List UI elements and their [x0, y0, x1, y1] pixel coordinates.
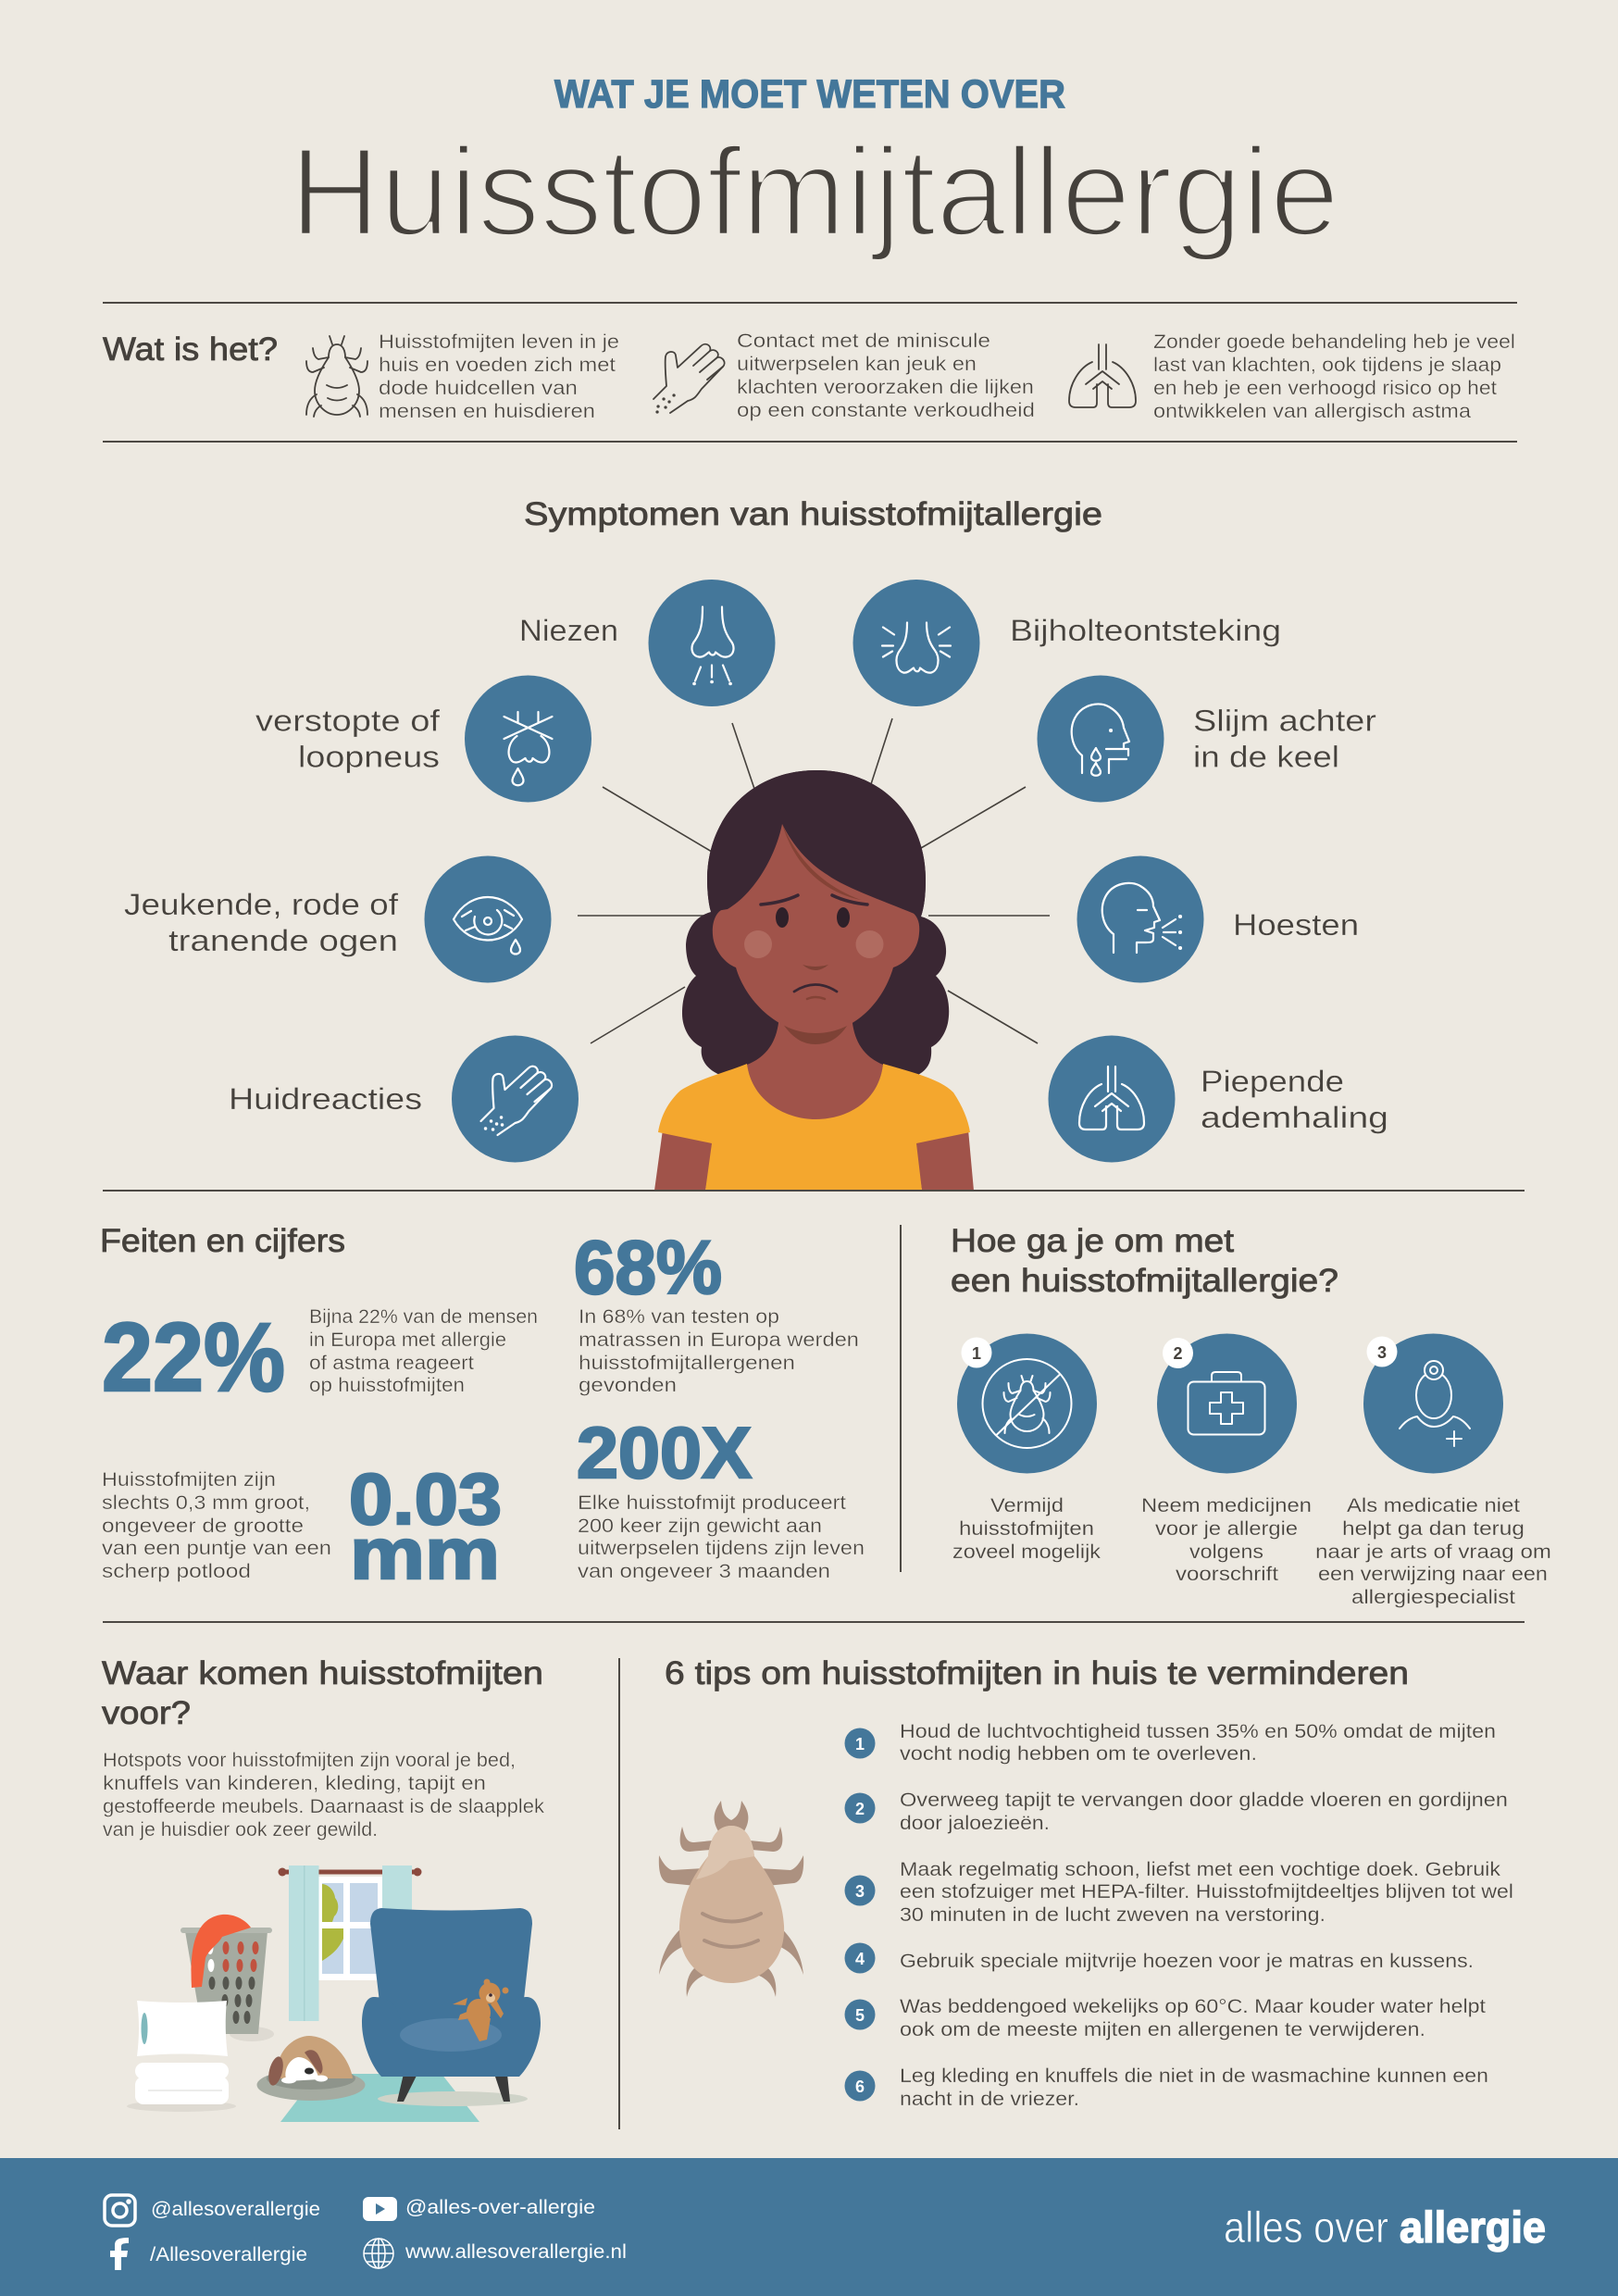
tip 2: door jaloezieën.: [900, 1813, 1050, 1834]
tip 3: Maak regelmatig schoon, liefst met een vochtige doek. Gebruik: [900, 1859, 1501, 1880]
symptom: piepende ademhaling: [1048, 1035, 1388, 1163]
social: instagram handle: @allesoverallergie: [151, 2199, 320, 2220]
woman illustration: [654, 770, 974, 1191]
symptom: jeukende ogen: tranende ogen: [168, 924, 398, 957]
tip 3: 3: [855, 1882, 865, 1901]
window and curtains: [278, 1866, 422, 2021]
stat: 0.03 mm: [349, 1458, 502, 1594]
text: 200x: uitwerpselen tijdens zijn leven: [578, 1538, 865, 1559]
step 2: medicijnen: voor je allergie: [1155, 1518, 1298, 1540]
sleeping dog on bed: [257, 2036, 365, 2101]
logo: [1224, 2202, 1546, 2252]
stat: 0.03 mm: mm: [350, 1513, 500, 1594]
tip 6: Leg kleding en knuffels die niet in de wasmachine kunnen een: [900, 2065, 1488, 2087]
text: 0,3 mm: Huisstofmijten zijn: [102, 1469, 276, 1491]
heading: waar komen: voor?: [102, 1695, 191, 1731]
text: 0,3 mm: ongeveer de grootte: [102, 1516, 304, 1537]
heading: 6 tips: 6 tips om huisstofmijten in huis te verminderen: [665, 1655, 1409, 1691]
panel: feiten en cijfers: [100, 1223, 865, 1594]
text: 68%: matrassen in Europa werden: [579, 1329, 859, 1351]
heading: symptomen: Symptomen van huisstofmijtallergie: [524, 496, 1102, 532]
icon: lungs outline: [1069, 344, 1136, 407]
symptom: slijm achter in de keel: Slijm achter: [1193, 704, 1376, 737]
panel: waar komen huisstofmijten voor: [102, 1655, 545, 2122]
symptom: jeukende ogen: Jeukende, rode of: [124, 888, 398, 921]
heading: wat is het: Wat is het?: [103, 331, 278, 368]
step 2: medicijnen: 2: [1173, 1344, 1183, 1363]
step 1: vermijd: Vermijd: [990, 1495, 1064, 1516]
rug: [280, 2074, 479, 2122]
text: hotspots: [103, 1750, 545, 1841]
text: 68%: gevonden: [579, 1375, 677, 1396]
step 1: vermijd: huisstofmijten: [959, 1518, 1094, 1540]
text: 22%: of astma reageert: [309, 1353, 474, 1374]
heading: waar komen: Waar komen huisstofmijten: [102, 1655, 543, 1691]
social: youtube handle: @alles-over-allergie: [405, 2197, 595, 2218]
tip 5: [844, 1996, 1486, 2040]
step 2: medicijnen: [1141, 1333, 1312, 1585]
footer band: [0, 2158, 1618, 2296]
tip 1: 1: [855, 1735, 865, 1753]
step 2: medicijnen: voorschrift: [1176, 1564, 1278, 1585]
text: contact: klachten veroorzaken die lijken: [737, 377, 1034, 398]
step 2: medicijnen: Neem medicijnen: [1141, 1495, 1312, 1516]
logo: alles over: [1224, 2202, 1388, 2252]
icon: instagram: [105, 2195, 135, 2226]
heading: feiten: Feiten en cijfers: [100, 1223, 345, 1259]
symptom: hoesten: [1077, 855, 1359, 983]
symptom: niezen: Niezen: [519, 614, 618, 647]
stat: 22%: 22%: [102, 1304, 285, 1412]
step 1: vermijd: zoveel mogelijk: [952, 1541, 1101, 1563]
step 3: arts: helpt ga dan terug: [1342, 1518, 1525, 1540]
text: klachten: last van klachten, ook tijdens je slaap: [1153, 355, 1501, 376]
tip 4: 4: [855, 1950, 865, 1968]
panel: wat is het: [103, 331, 1515, 422]
icon: facebook: [110, 2238, 129, 2270]
text: contact: op een constante verkoudheid: [737, 400, 1035, 421]
icon: dust mite outline: [306, 336, 367, 417]
heading: hoe ga je om: een huisstofmijtallergie?: [951, 1263, 1338, 1299]
symptom: slijm achter in de keel: [1037, 676, 1376, 802]
step 3: arts: [1315, 1333, 1551, 1608]
text: 68%: [579, 1306, 859, 1396]
social: website: www.allesoverallergie.nl: [404, 2241, 627, 2263]
text: 200x: [578, 1492, 865, 1582]
text: 0,3 mm: scherp potlood: [102, 1561, 251, 1582]
step 1: vermijd: 1: [972, 1344, 981, 1363]
title kicker: WAT JE MOET WETEN OVER: [554, 72, 1065, 117]
tip 3: 30 minuten in de lucht zweven na verstoring.: [900, 1904, 1326, 1926]
tip 3: een stofzuiger met HEPA-filter. Huisstofmijtdeeltjes blijven tot wel: [900, 1881, 1513, 1903]
tip 5: Was beddengoed wekelijks op 60°C. Maar kouder water helpt: [900, 1996, 1486, 2017]
tip 6: 6: [855, 2078, 865, 2096]
symptom: hoesten: Hoesten: [1233, 908, 1359, 942]
connector lines: [578, 718, 1050, 1043]
tip 2: 2: [855, 1800, 865, 1818]
tip 1: Houd de luchtvochtigheid tussen 35% en 50% omdat de mijten: [900, 1721, 1496, 1742]
symptom: bijholteontsteking: [853, 580, 1281, 706]
tip 5: 5: [855, 2006, 865, 2025]
tip 6: nacht in de vriezer.: [900, 2089, 1079, 2110]
illustration: dust mite: [659, 1801, 803, 1997]
tip 2: [844, 1790, 1508, 1834]
text: 0,3 mm: slechts 0,3 mm groot,: [102, 1492, 310, 1514]
symptom: bijholteontsteking: Bijholteontsteking: [1010, 614, 1281, 647]
text: mijten: Huisstofmijten leven in je: [379, 331, 619, 353]
text: mijten: huis en voeden zich met: [379, 355, 616, 376]
illustration: living room: [127, 1866, 541, 2122]
symptom: huidreacties: [229, 1035, 579, 1163]
symptom: slijm achter in de keel: in de keel: [1193, 741, 1339, 774]
logo: allergie: [1400, 2202, 1546, 2252]
tip 5: ook om de meeste mijten en allergenen te verwijderen.: [900, 2019, 1425, 2040]
symptom: niezen: [519, 580, 776, 706]
armchair: [362, 1908, 541, 2106]
tip 2: Overweeg tapijt te vervangen door gladde vloeren en gordijnen: [900, 1790, 1508, 1811]
text: klachten: ontwikkelen van allergisch astma: [1153, 401, 1471, 422]
symptom: verstopte of loopneus: verstopte of: [255, 704, 440, 737]
icon: youtube: [363, 2197, 397, 2221]
symptom: jeukende ogen: [124, 855, 552, 983]
text: 200x: van ongeveer 3 maanden: [578, 1561, 830, 1582]
stat: 68%: 68%: [574, 1226, 722, 1310]
tip 1: [844, 1721, 1496, 1765]
step 3: arts: allergiespecialist: [1351, 1587, 1515, 1608]
text: mijten: dode huidcellen van: [379, 378, 578, 399]
text: klachten: en heb je een verhoogd risico op het: [1153, 378, 1497, 399]
stat: 200X: 200X: [577, 1412, 752, 1493]
step 3: arts: 3: [1377, 1343, 1387, 1362]
tip 4: Gebruik speciale mijtvrije hoezen voor je matras en kussens.: [900, 1951, 1474, 1972]
symptom: huidreacties: Huidreacties: [229, 1082, 422, 1116]
text: 68%: In 68% van testen op: [579, 1306, 779, 1328]
stat: 0.03 mm: 0.03: [349, 1458, 502, 1540]
text: klachten: [1153, 331, 1515, 422]
text: hotspots: Hotspots voor huisstofmijten zijn vooral je bed,: [103, 1750, 516, 1771]
symptom: verstopte of loopneus: loopneus: [298, 741, 440, 774]
tip 6: [844, 2065, 1488, 2110]
pillows and blankets: [127, 2001, 236, 2112]
social: facebook handle: /Allesoverallergie: [150, 2244, 307, 2265]
text: klachten: Zonder goede behandeling heb je veel: [1153, 331, 1515, 353]
symptom: verstopte of loopneus: [255, 676, 591, 802]
text: 68%: huisstofmijtallergenen: [579, 1353, 795, 1374]
step 1: vermijd: [952, 1333, 1101, 1563]
heading: hoe ga je om: [951, 1223, 1338, 1299]
step 3: arts: naar je arts of vraag om: [1315, 1541, 1551, 1563]
text: 22%: [309, 1306, 538, 1396]
icon: globe: [364, 2239, 393, 2268]
text: hotspots: van je huisdier ook zeer gewild.: [103, 1819, 378, 1841]
text: 22%: in Europa met allergie: [309, 1329, 506, 1351]
tip 1: vocht nodig hebben om te overleven.: [900, 1743, 1257, 1765]
text: contact: Contact met de miniscule: [737, 331, 990, 352]
text: contact: [737, 331, 1035, 421]
teddy bear: [453, 1979, 509, 2041]
text: hotspots: knuffels van kinderen, kleding, tapijt en: [103, 1773, 486, 1794]
text: contact: uitwerpselen kan jeuk en: [737, 354, 977, 375]
text: 0,3 mm: [102, 1469, 331, 1582]
laundry basket: [180, 1915, 274, 2041]
main title: Huisstofmijtallergie: [290, 121, 1339, 262]
text: 200x: Elke huisstofmijt produceert: [578, 1492, 846, 1514]
icon: hand outline: [653, 344, 725, 413]
text: mijten: [379, 331, 619, 422]
symptom: piepende ademhaling: ademhaling: [1201, 1101, 1388, 1134]
tip 4: [844, 1942, 1474, 1974]
step 3: arts: Als medicatie niet: [1347, 1495, 1520, 1516]
heading: hoe ga je om: Hoe ga je om met: [951, 1223, 1234, 1259]
text: hotspots: gestoffeerde meubels. Daarnaast is de slaapplek: [103, 1796, 545, 1817]
panel: hoe ga je om: [951, 1223, 1551, 1608]
step 3: arts: een verwijzing naar een: [1318, 1564, 1548, 1585]
panel: 6 tips: [659, 1655, 1513, 2110]
text: 22%: op huisstofmijten: [309, 1375, 465, 1396]
symptom: piepende ademhaling: Piepende: [1201, 1065, 1344, 1098]
text: 0,3 mm: van een puntje van een: [102, 1538, 331, 1559]
text: 22%: Bijna 22% van de mensen: [309, 1306, 538, 1328]
tip 3: [844, 1859, 1513, 1926]
text: mijten: mensen en huisdieren: [379, 401, 595, 422]
text: 200x: 200 keer zijn gewicht aan: [578, 1516, 822, 1537]
heading: waar komen: [102, 1655, 543, 1731]
step 2: medicijnen: volgens: [1189, 1541, 1263, 1563]
